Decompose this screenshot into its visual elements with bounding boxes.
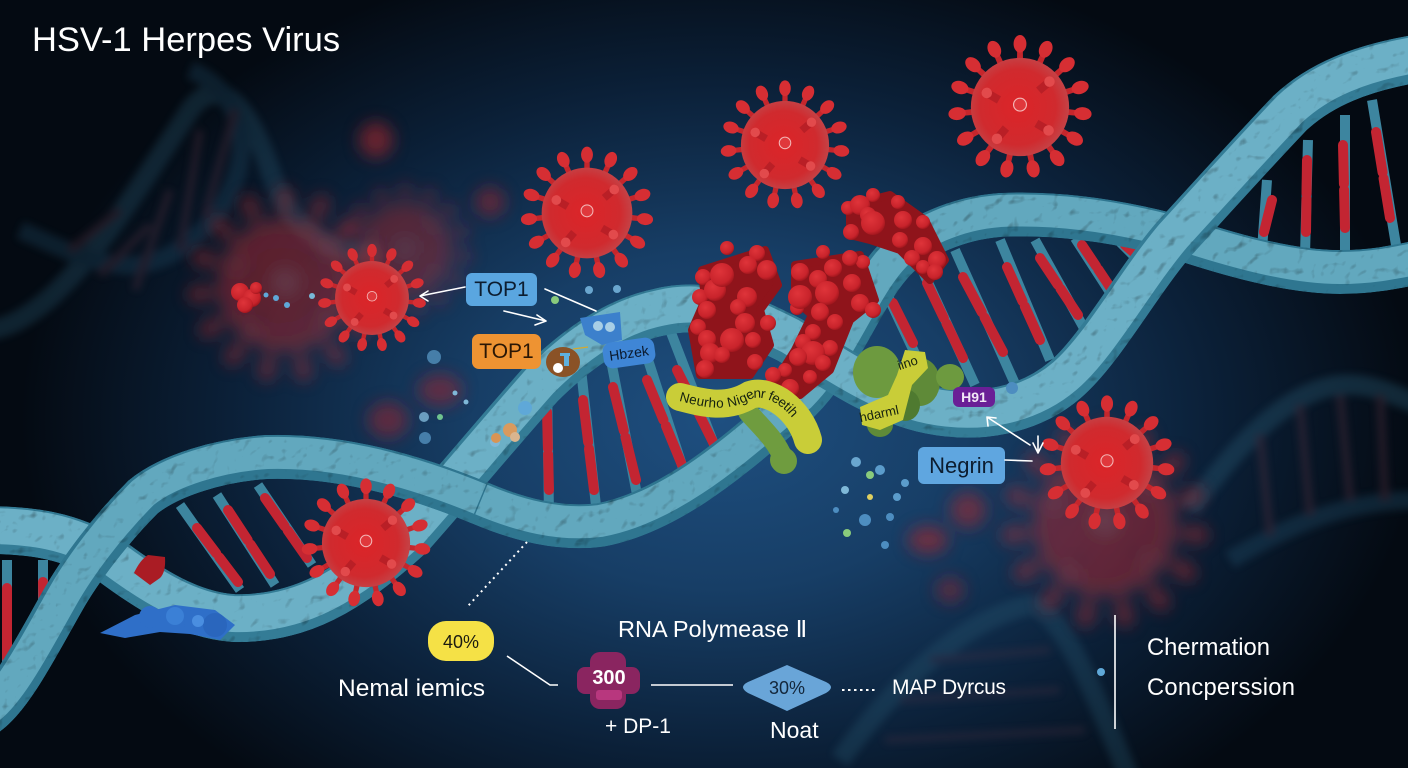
faded background DNA: right (1190, 385, 1408, 560)
legend divider and dot (1097, 615, 1115, 729)
label: Noat: Noat (770, 717, 819, 743)
DNA strand A: left front section (0, 453, 480, 715)
label: H91: H91 (961, 389, 987, 405)
virus: on lower helix (301, 478, 431, 607)
red protein cluster 2 (760, 245, 881, 397)
connector 40% to 300 (507, 656, 558, 685)
arrows (420, 287, 1043, 461)
floating molecules (264, 285, 1018, 549)
heading: RNA Polymease II: RNA Polymease Ⅱ (618, 616, 807, 642)
40% badge (428, 621, 494, 661)
label: MAP Dyrcus: MAP Dyrcus (892, 676, 1006, 699)
blue binding protein (580, 312, 657, 369)
green protein complex: hdarml (858, 402, 900, 425)
virus: upper centre-left (520, 147, 654, 279)
yellow ribbon label: Neurho Nigenr feetih (680, 390, 796, 418)
DNA strand A (0, 210, 1408, 715)
faded background DNA: bottom right (840, 605, 1130, 768)
green protein under yellow ribbon (748, 412, 784, 461)
label: TOP1 blue: TOP1 (474, 278, 529, 301)
blue protein at lower left (100, 605, 235, 640)
faded background viruses (186, 122, 1210, 629)
virus: right (1039, 395, 1175, 530)
DNA strand B (0, 54, 1408, 618)
label: TOP1 orange (472, 334, 541, 369)
dotted leader from helix (468, 542, 527, 606)
30% diamond (743, 665, 831, 711)
title: HSV-1 Herpes Virus (32, 21, 340, 59)
green protein complex: iino (896, 352, 920, 373)
virus: top centre (720, 80, 850, 209)
label: Negrin (918, 447, 1005, 484)
red patch near lower left helix (134, 555, 165, 585)
label: + DP-1: + DP-1 (605, 715, 671, 738)
red protein cluster 1 (690, 241, 778, 378)
brown enzyme (546, 347, 588, 377)
legend text (1147, 634, 1295, 701)
legend text: Concperssion (1147, 674, 1295, 701)
magenta 300 node: 300 (592, 667, 626, 689)
yellow ribbon label (666, 380, 822, 454)
label: Negrin: Negrin (929, 453, 994, 478)
label: Nemal iemics: Nemal iemics (338, 675, 485, 702)
red protein cluster 3 (841, 188, 946, 280)
connector 300 to 30% (651, 684, 733, 686)
faded background DNA: top left (0, 70, 380, 330)
30% diamond: 30% (769, 678, 805, 698)
legend text: Chermation (1147, 634, 1270, 661)
magenta 300 node (577, 652, 640, 709)
small red cluster left of virus (231, 282, 262, 313)
label: TOP1 orange: TOP1 (479, 340, 534, 363)
green protein complex (853, 346, 964, 437)
blue binding protein: Hbzek (608, 342, 651, 364)
dotted connector (842, 689, 876, 691)
virus: left (318, 244, 426, 352)
label: H91 (953, 387, 995, 407)
40% badge: 40% (443, 632, 479, 652)
DNA rungs: all base pairs (7, 100, 1396, 670)
virus: top right (948, 35, 1092, 179)
label: TOP1 blue (466, 273, 537, 306)
